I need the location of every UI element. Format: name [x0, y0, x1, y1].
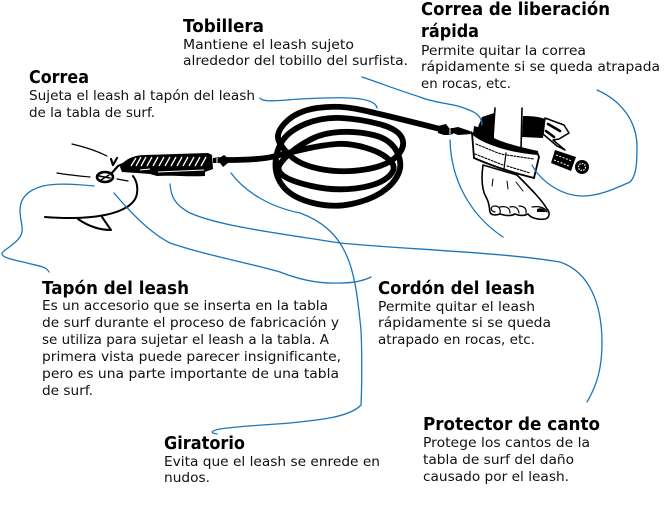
illustration: swivel connector	[213, 155, 228, 167]
callout line: correa de liberación rápida	[532, 90, 637, 196]
label: correa: Sujeta el leash al tapón del leash	[29, 88, 255, 104]
label: protector de canto: causado por el leash.	[423, 469, 569, 485]
label: protector de canto: tabla de surf del daño	[423, 452, 574, 468]
illustration: cord end connector	[438, 124, 472, 135]
label: giratorio: Giratorio	[164, 434, 245, 454]
illustration: coiled leash cord	[226, 107, 440, 206]
illustration: foot with ankle strap	[472, 108, 589, 219]
label: tobillera: Mantiene el leash sujeto	[183, 37, 354, 53]
callout line: correa	[260, 98, 377, 108]
label: cordón del leash: Cordón del leash	[378, 279, 535, 299]
callout line: cordón del leash	[114, 193, 371, 283]
label: tobillera	[183, 17, 408, 69]
label: tapón del leash: Tapón del leash	[42, 279, 189, 299]
callout line: protector de canto upper	[450, 140, 503, 237]
label: tapón del leash: primera vista puede parecer insignificante,	[42, 349, 341, 365]
label: tapón del leash: de surf durante el proceso de fabricación y	[42, 315, 339, 331]
illustration: leash plug	[97, 158, 123, 182]
callout line: tapón del leash	[2, 184, 94, 272]
label: tapón del leash: Es un accesorio que se inserta en la tabla	[42, 298, 328, 314]
label: correa de liberación rápida: rápidamente si se queda atrapada	[421, 59, 660, 75]
label: correa de liberación rápida: Correa de liberación	[421, 0, 610, 20]
label: correa de liberación rápida: Permite quitar la correa	[421, 43, 586, 59]
label: protector de canto	[423, 415, 600, 485]
label: correa de liberación rápida: rápida	[421, 22, 479, 42]
label: cordón del leash: Permite quitar el leash	[378, 299, 535, 315]
label: giratorio	[164, 434, 380, 486]
label: tapón del leash: pero es una parte importante de una tabla	[42, 366, 339, 382]
label: giratorio: nudos.	[164, 470, 210, 486]
label: tapón del leash: de surf.	[42, 383, 93, 399]
illustration: leash rail saver	[120, 153, 213, 176]
label: correa de liberación rápida: en rocas, etc.	[421, 76, 511, 92]
label: giratorio: Evita que el leash se enrede en	[164, 454, 380, 470]
label: correa: Correa	[29, 68, 89, 88]
label: correa: de la tabla de surf.	[29, 105, 155, 121]
label: cordón del leash	[378, 279, 551, 348]
callout line: protector de canto lower	[170, 184, 602, 402]
label: protector de canto: Protege los cantos de la	[423, 435, 590, 451]
label: tobillera: alrededor del tobillo del surfista.	[183, 53, 408, 69]
label: tobillera: Tobillera	[183, 17, 264, 37]
callout line: tobillera	[362, 77, 482, 125]
callout line: giratorio	[212, 173, 362, 434]
label: cordón del leash: atrapado en rocas, etc.	[378, 332, 535, 348]
label: tapón del leash: se utiliza para sujetar el leash a la tabla. A	[42, 332, 330, 348]
illustration: surfboard tail with fin	[45, 144, 137, 230]
label: protector de canto: Protector de canto	[423, 415, 600, 435]
label: correa de liberación rápida	[421, 0, 660, 92]
label: correa	[29, 68, 255, 121]
label: cordón del leash: rápidamente si se queda	[378, 315, 551, 331]
label: tapón del leash	[42, 279, 341, 399]
